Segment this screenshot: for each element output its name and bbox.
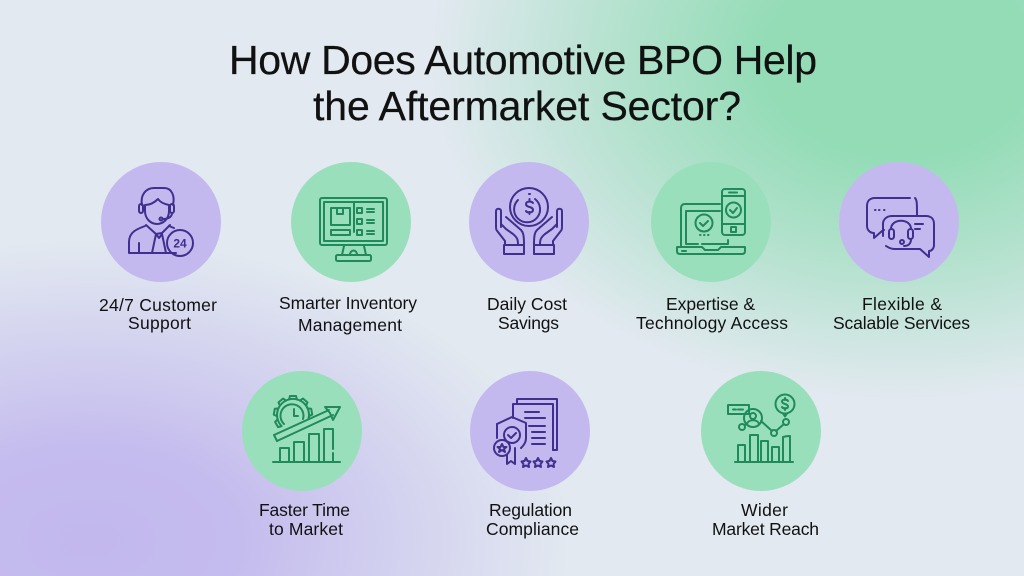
icon: documents, shield, seal and stars [470,371,590,491]
label: Faster Time [259,500,350,520]
label: Scalable Services [833,313,970,333]
label [487,294,567,333]
item: expertise and technology access [636,162,788,333]
label: Smarter Inventory [279,293,417,313]
item: wider market reach [701,371,821,539]
icon: agent with headset and 24 badge: 24 [173,236,187,250]
label [259,500,350,539]
item: smarter inventory management [279,162,417,335]
label: Regulation [489,500,572,520]
icon: chat bubbles with headset [839,162,959,282]
label [712,500,819,539]
label: Management [298,315,402,335]
icon: laptop and phone with checkmarks [651,162,771,282]
icon: hands holding coin [469,162,589,282]
label: Wider [741,500,788,520]
label: to Market [269,519,343,539]
item: regulation compliance [470,371,590,539]
icon: market chart with person and dollar pin [701,371,821,491]
label: Support [128,313,191,333]
label: Technology Access [636,313,788,333]
label: Market Reach [712,519,819,539]
item: faster time to market [242,371,362,539]
label [636,294,788,333]
label: Expertise & [666,294,755,314]
icon: gear clock with rising arrow and bars [242,371,362,491]
label: Flexible & [862,294,942,314]
icon: agent with headset and 24 badge [101,162,221,282]
label: Savings [498,313,559,333]
label: Compliance [486,519,579,539]
label [279,293,417,335]
label: 24/7 Customer [99,295,217,315]
item: flexible and scalable services [833,162,970,333]
label [833,294,970,333]
item: daily cost savings [469,162,589,333]
label [486,500,579,539]
label [99,295,217,333]
title: the Aftermarket Sector? [313,83,741,129]
label: Daily Cost [487,294,567,314]
icon: monitor with inventory dashboard [291,162,411,282]
item: 24/7 customer support [99,162,221,333]
title [229,37,817,129]
title: How Does Automotive BPO Help [229,37,817,83]
